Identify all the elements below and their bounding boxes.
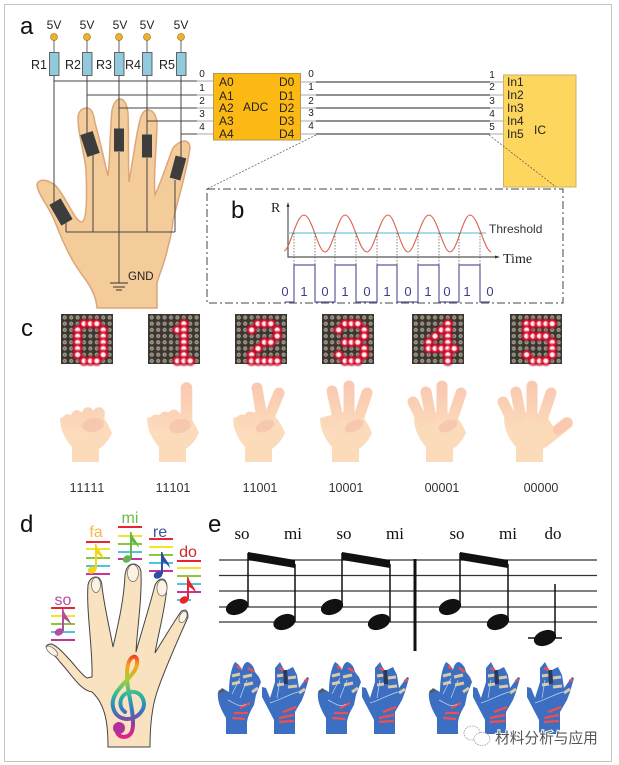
output wires dark bbox=[316, 82, 490, 134]
solfege labels: mi bbox=[122, 510, 138, 527]
binary digits: 1 bbox=[424, 284, 432, 299]
resistor labels bbox=[31, 58, 175, 72]
GND label: GND bbox=[128, 271, 154, 283]
hand gesture 3 bbox=[320, 386, 372, 462]
binary digits bbox=[281, 284, 494, 299]
ADC labels: ADC bbox=[243, 100, 269, 114]
note so bbox=[53, 609, 71, 637]
staff so bbox=[51, 608, 75, 640]
flex sensors bbox=[49, 128, 186, 226]
staff re bbox=[149, 539, 173, 571]
ADC labels: D4 bbox=[279, 127, 295, 141]
voltage labels: 5V bbox=[174, 18, 188, 32]
IC box bbox=[504, 75, 576, 187]
syllable labels: so bbox=[449, 524, 465, 543]
voltage labels: 5V bbox=[113, 18, 127, 32]
note stems bbox=[248, 553, 555, 638]
syllable labels: do bbox=[544, 524, 562, 543]
LED matrix 0 bbox=[61, 314, 113, 367]
wire numbers right of ADC: 0 bbox=[308, 69, 314, 80]
note do bbox=[178, 577, 196, 605]
staff lines bbox=[219, 560, 597, 622]
binary digits: 0 bbox=[321, 284, 329, 299]
threshold line bbox=[288, 232, 486, 234]
binary digits: 0 bbox=[363, 284, 371, 299]
watermark text: 材料分析与应用 bbox=[495, 729, 598, 747]
resistor labels: R3 bbox=[96, 58, 112, 72]
LED matrix 3 bbox=[322, 314, 374, 367]
treble clef bbox=[113, 657, 144, 737]
binary digits: 0 bbox=[404, 284, 412, 299]
IC labels: In5 bbox=[507, 127, 524, 141]
resistor labels: R1 bbox=[31, 58, 47, 72]
label b: b bbox=[231, 197, 244, 224]
binary codes: 11101 bbox=[156, 481, 190, 495]
binary digits: 1 bbox=[341, 284, 349, 299]
ADC box bbox=[214, 74, 300, 140]
binary codes: 00001 bbox=[425, 481, 459, 495]
note heads bbox=[224, 596, 558, 649]
output wires bbox=[301, 82, 503, 134]
syllable labels: mi bbox=[284, 524, 302, 543]
bar line bbox=[414, 559, 416, 651]
ADC labels: A1 bbox=[219, 89, 234, 103]
voltage labels: 5V bbox=[140, 18, 154, 32]
wire numbers left: 4 bbox=[199, 122, 205, 133]
hand gesture 0 bbox=[60, 412, 112, 462]
LED matrix 5 bbox=[510, 314, 562, 367]
zoom lines to panel b bbox=[207, 135, 556, 189]
panel e: music score bbox=[208, 511, 597, 734]
resistor labels: R4 bbox=[125, 58, 141, 72]
syllable labels: mi bbox=[386, 524, 404, 543]
wire numbers right of ADC: 2 bbox=[308, 96, 314, 107]
binary codes bbox=[70, 481, 558, 495]
panel a: glove circuit bbox=[20, 13, 576, 308]
ADC labels: D1 bbox=[279, 89, 295, 103]
IC labels: In1 bbox=[507, 75, 524, 89]
terminal stems bbox=[54, 40, 181, 52]
note fa bbox=[86, 544, 104, 575]
hand gesture 2 bbox=[233, 388, 285, 462]
panel frame bbox=[207, 189, 563, 303]
wire numbers left: 0 bbox=[199, 69, 205, 80]
resistor labels: R2 bbox=[65, 58, 81, 72]
ADC labels: A3 bbox=[219, 114, 234, 128]
wire numbers right of ADC: 1 bbox=[308, 82, 314, 93]
wire numbers left bbox=[199, 69, 205, 133]
time label: Time bbox=[503, 252, 532, 267]
ADC labels: D0 bbox=[279, 75, 295, 89]
binary digits: 0 bbox=[281, 284, 289, 299]
syllable labels: so bbox=[234, 524, 250, 543]
binary digits: 0 bbox=[443, 284, 451, 299]
wire numbers before IC bbox=[489, 70, 495, 133]
wire numbers before IC: 2 bbox=[489, 82, 495, 93]
ground symbol bbox=[110, 283, 128, 290]
note beams bbox=[248, 552, 508, 568]
note mi bbox=[121, 532, 139, 564]
binary digits: 1 bbox=[300, 284, 308, 299]
binary codes: 11111 bbox=[70, 481, 104, 495]
IC labels: In4 bbox=[507, 114, 524, 128]
LED matrix 1 bbox=[148, 314, 200, 367]
staff do bbox=[177, 561, 201, 600]
ADC labels: D2 bbox=[279, 101, 295, 115]
dotted guides bbox=[294, 233, 480, 265]
IC labels: In3 bbox=[507, 101, 524, 115]
staff fa bbox=[86, 542, 110, 574]
wire numbers before IC: 1 bbox=[489, 70, 495, 81]
label a: a bbox=[20, 13, 34, 40]
wire numbers left: 2 bbox=[199, 96, 205, 107]
axis arrowheads bbox=[286, 202, 500, 258]
binary codes: 10001 bbox=[329, 481, 363, 495]
hand gesture 4 bbox=[413, 386, 466, 462]
binary codes: 11001 bbox=[243, 481, 277, 495]
ledger line bbox=[528, 637, 562, 639]
wire numbers left: 1 bbox=[199, 83, 205, 94]
solfege labels: do bbox=[179, 544, 197, 561]
wire numbers right of ADC: 3 bbox=[308, 108, 314, 119]
5V terminals bbox=[50, 34, 184, 40]
LED matrix 4 bbox=[412, 314, 464, 367]
syllable labels: so bbox=[336, 524, 352, 543]
syllable labels bbox=[234, 524, 562, 543]
ADC labels: A0 bbox=[219, 75, 234, 89]
label e: e bbox=[208, 511, 221, 538]
solfege labels: fa bbox=[89, 524, 103, 541]
threshold label: Threshold bbox=[489, 222, 542, 236]
square wave bbox=[285, 265, 490, 302]
wire numbers left: 3 bbox=[199, 109, 205, 120]
wechat icon bbox=[464, 726, 490, 746]
ADC labels: A2 bbox=[219, 101, 234, 115]
finger nails bbox=[45, 564, 189, 658]
hand gesture 5 bbox=[503, 386, 567, 462]
panel d: hand with notes bbox=[20, 510, 201, 747]
staff mi bbox=[118, 527, 142, 559]
solfege labels: re bbox=[153, 524, 167, 541]
voltage labels: 5V bbox=[80, 18, 94, 32]
axes bbox=[288, 204, 497, 257]
note re bbox=[152, 552, 170, 580]
IC labels bbox=[507, 75, 546, 141]
wire numbers right of ADC bbox=[308, 69, 314, 132]
voltage labels: 5V bbox=[47, 18, 61, 32]
hand outline bbox=[37, 99, 190, 308]
syllable labels: mi bbox=[499, 524, 517, 543]
resistor labels: R5 bbox=[159, 58, 175, 72]
LED matrix 2 bbox=[235, 314, 287, 367]
binary digits: 0 bbox=[486, 284, 494, 299]
panel c: gesture digits bbox=[21, 314, 567, 495]
resistor wires bbox=[54, 75, 213, 283]
ADC labels: D3 bbox=[279, 114, 295, 128]
wire numbers before IC: 4 bbox=[489, 109, 495, 120]
voltage labels bbox=[47, 18, 188, 32]
binary digits: 1 bbox=[383, 284, 391, 299]
label d: d bbox=[20, 511, 33, 538]
watermark bbox=[464, 726, 598, 747]
ADC labels: A4 bbox=[219, 127, 234, 141]
IC labels: IC bbox=[534, 123, 546, 137]
binary digits: 1 bbox=[463, 284, 471, 299]
binary codes: 00000 bbox=[524, 481, 558, 495]
hand gesture 1 bbox=[147, 388, 199, 462]
hand bbox=[46, 564, 188, 747]
wire numbers before IC: 5 bbox=[489, 122, 495, 133]
label c: c bbox=[21, 315, 33, 342]
wire numbers right of ADC: 4 bbox=[308, 121, 314, 132]
glove photos bbox=[218, 662, 574, 734]
resistance sine wave bbox=[284, 215, 491, 252]
ADC labels bbox=[219, 75, 295, 141]
light wire ends bbox=[197, 81, 213, 134]
wire numbers before IC: 3 bbox=[489, 96, 495, 107]
solfege labels bbox=[55, 510, 197, 609]
panel b: signal thresholding bbox=[207, 189, 563, 303]
axis labels: R bbox=[271, 201, 281, 216]
IC labels: In2 bbox=[507, 88, 524, 102]
resistors bbox=[50, 52, 186, 76]
solfege labels: so bbox=[55, 592, 72, 609]
